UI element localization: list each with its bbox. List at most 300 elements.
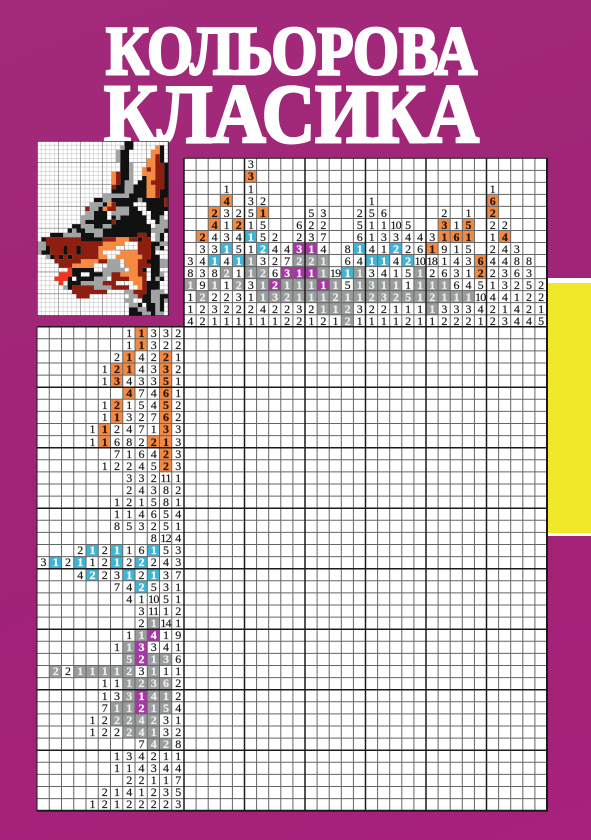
left row clues: 2 xyxy=(114,398,119,412)
top column clues: 3 xyxy=(466,302,471,316)
left row clues: 6 xyxy=(163,676,168,690)
top column clues: 1 xyxy=(296,290,302,304)
top column clues: 2 xyxy=(369,302,374,316)
left row clues: 2 xyxy=(126,483,132,497)
left row clues: 5 xyxy=(163,374,168,388)
top column clues: 2 xyxy=(538,290,543,304)
top column clues: 4 xyxy=(466,278,471,292)
left row clues: 2 xyxy=(102,543,107,557)
left row clues: 1 xyxy=(89,543,95,557)
top column clues: 4 xyxy=(187,314,193,328)
top column clues: 1 xyxy=(393,278,398,292)
top column clues: 2 xyxy=(357,206,362,220)
top column clues: 2 xyxy=(296,230,302,244)
left row clues: 1 xyxy=(163,604,168,618)
top column clues: 5 xyxy=(236,242,241,256)
top column clues: 4 xyxy=(502,254,507,268)
top column clues: 1 xyxy=(429,278,435,292)
top column clues: 1 xyxy=(381,218,386,232)
left row clues: 4 xyxy=(138,713,144,727)
left row clues: 1 xyxy=(175,580,181,594)
left row clues: 2 xyxy=(175,483,181,497)
top column clues: 3 xyxy=(248,278,253,292)
left row clues: 1 xyxy=(114,543,119,557)
top column clues: 1 xyxy=(453,218,459,232)
top column clues: 6 xyxy=(478,254,483,268)
left row clues: 2 xyxy=(102,568,107,582)
left row clues: 2 xyxy=(114,725,119,739)
top column clues: 1 xyxy=(320,290,326,304)
left row clues: 1 xyxy=(102,422,107,436)
top column clues: 1 xyxy=(212,254,217,268)
left row clues: 4 xyxy=(126,785,132,799)
top column clues: 6 xyxy=(417,242,422,256)
left row clues: 1 xyxy=(126,362,132,376)
top column clues: 1 xyxy=(417,302,422,316)
top column clues: 1 xyxy=(381,278,386,292)
top column clues: 4 xyxy=(502,230,507,244)
left row clues: 3 xyxy=(163,785,168,799)
left row clues: 7 xyxy=(114,447,119,461)
left row clues: 1 xyxy=(151,773,156,787)
left row clues: 2 xyxy=(89,568,95,582)
top column clues: 2 xyxy=(236,218,241,232)
left row clues: 1 xyxy=(175,592,181,606)
left row clues: 6 xyxy=(175,652,181,666)
top column clues: 7 xyxy=(320,230,326,244)
left row clues: 5 xyxy=(163,507,168,521)
top column clues: 1 xyxy=(357,314,362,328)
top column clues: 1 xyxy=(357,290,362,304)
top column clues: 4 xyxy=(224,254,229,268)
top column clues: 3 xyxy=(441,218,447,232)
top column clues: 2 xyxy=(236,302,241,316)
left row clues: 5 xyxy=(126,519,132,533)
left row clues: 1 xyxy=(114,664,119,678)
top column clues xyxy=(184,157,544,328)
top column clues: 1 xyxy=(224,278,229,292)
left row clues: 1 xyxy=(126,761,132,775)
top column clues: 1 xyxy=(248,254,253,268)
top column clues: 2 xyxy=(199,302,205,316)
left row clues: 1 xyxy=(89,435,95,449)
top column clues: 3 xyxy=(296,302,302,316)
top column clues: 7 xyxy=(284,254,289,268)
left row clues: 11 xyxy=(161,471,171,485)
top column clues: 2 xyxy=(296,254,302,268)
top column clues: 4 xyxy=(212,230,217,244)
left row clues: 1 xyxy=(89,555,95,569)
left row clues: 3 xyxy=(151,326,156,340)
top column clues: 2 xyxy=(381,302,386,316)
left row clues: 2 xyxy=(151,519,156,533)
left row clues: 2 xyxy=(151,555,156,569)
top column clues: 3 xyxy=(224,206,229,220)
left row clues: 4 xyxy=(175,761,181,775)
top column clues: 2 xyxy=(453,314,459,328)
left row clues: 2 xyxy=(175,604,181,618)
top column clues: 1 xyxy=(441,230,447,244)
left row clues: 5 xyxy=(163,701,168,715)
top column clues: 6 xyxy=(453,230,459,244)
left row clues: 3 xyxy=(114,568,119,582)
left row clues: 1 xyxy=(114,676,119,690)
top column clues: 4 xyxy=(453,254,459,268)
top column clues: 4 xyxy=(490,254,495,268)
top column clues: 5 xyxy=(538,314,543,328)
left row clues: 1 xyxy=(114,749,119,763)
left row clues: 6 xyxy=(114,435,119,449)
top column clues: 6 xyxy=(453,278,459,292)
left row clues: 5 xyxy=(126,652,132,666)
left row clues: 7 xyxy=(138,422,144,436)
left row clues: 4 xyxy=(126,580,132,594)
top column clues: 2 xyxy=(490,302,495,316)
top column clues: 4 xyxy=(369,242,374,256)
top column clues: 2 xyxy=(490,206,495,220)
left row clues: 1 xyxy=(175,616,181,630)
left row clues: 1 xyxy=(151,422,156,436)
left row clues: 3 xyxy=(40,555,46,569)
top column clues: 1 xyxy=(369,314,374,328)
title: КОЛЬОРОВА xyxy=(106,13,477,89)
left row clues: 3 xyxy=(151,362,156,376)
left row clues: 1 xyxy=(114,797,119,811)
top column clues: 1 xyxy=(381,242,386,256)
top column clues: 1 xyxy=(453,290,459,304)
left row clues: 1 xyxy=(102,459,107,473)
top column clues: 5 xyxy=(526,278,531,292)
left row clues: 1 xyxy=(89,725,95,739)
left row clues: 2 xyxy=(163,737,168,751)
top column clues: 2 xyxy=(369,290,374,304)
top column clues: 1 xyxy=(248,266,253,280)
left row clues: 3 xyxy=(163,652,168,666)
top column clues: 4 xyxy=(514,314,519,328)
top column clues: 2 xyxy=(466,314,471,328)
top column clues: 4 xyxy=(320,242,326,256)
top column clues: 1 xyxy=(466,206,471,220)
left row clues: 1 xyxy=(151,616,156,630)
top column clues: 1 xyxy=(248,314,253,328)
left row clues: 1 xyxy=(126,507,132,521)
left row clues: 1 xyxy=(138,688,144,702)
left row clues: 2 xyxy=(175,725,181,739)
top column clues: 3 xyxy=(393,230,398,244)
left row clues: 3 xyxy=(163,362,168,376)
left row clues: 3 xyxy=(114,688,119,702)
left row clues: 5 xyxy=(163,592,168,606)
top column clues: 1 xyxy=(224,242,229,256)
left row clues: 2 xyxy=(175,676,181,690)
left row clues: 1 xyxy=(102,676,107,690)
top column clues: 1 xyxy=(284,278,289,292)
top column clues: 1 xyxy=(320,278,326,292)
top column clues: 1 xyxy=(393,302,398,316)
top column clues: 1 xyxy=(236,266,241,280)
left row clues: 2 xyxy=(175,362,181,376)
top column clues: 6 xyxy=(490,194,495,208)
top column clues: 2 xyxy=(514,278,519,292)
left row clues: 2 xyxy=(102,785,107,799)
top column clues: 1 xyxy=(260,278,265,292)
top column clues: 2 xyxy=(199,290,205,304)
left row clues: 11 xyxy=(148,604,158,618)
left row clues: 1 xyxy=(175,374,181,388)
yellow side tab xyxy=(548,278,591,536)
top column clues: 1 xyxy=(405,278,410,292)
left row clues: 3 xyxy=(163,422,168,436)
top column clues: 4 xyxy=(199,254,205,268)
top column clues: 3 xyxy=(199,266,205,280)
left row clues: 3 xyxy=(151,676,156,690)
left row clues: 1 xyxy=(102,410,107,424)
left row clues: 2 xyxy=(163,350,168,364)
left row clues: 9 xyxy=(175,628,181,642)
left row clues: 2 xyxy=(163,447,168,461)
left row clues: 2 xyxy=(138,580,144,594)
left row clues: 1 xyxy=(126,568,132,582)
left row clues: 1 xyxy=(151,652,156,666)
top column clues: 1 xyxy=(248,230,253,244)
top column clues: 3 xyxy=(502,314,507,328)
top column clues: 2 xyxy=(393,242,398,256)
top column clues: 19 xyxy=(330,266,340,280)
left row clues: 1 xyxy=(175,713,181,727)
top column clues: 8 xyxy=(526,254,531,268)
left row clues: 2 xyxy=(151,797,156,811)
top column clues: 5 xyxy=(466,242,471,256)
top column clues: 1 xyxy=(224,182,229,196)
left row clues: 1 xyxy=(114,761,119,775)
top column clues: 1 xyxy=(236,314,241,328)
top column clues: 3 xyxy=(514,242,519,256)
left row clues: 4 xyxy=(175,701,181,715)
left row clues: 1 xyxy=(126,640,132,654)
top column clues: 1 xyxy=(308,314,314,328)
left row clues: 3 xyxy=(175,447,181,461)
top column clues: 1 xyxy=(320,254,326,268)
top column clues: 1 xyxy=(357,278,362,292)
left row clues: 1 xyxy=(89,713,95,727)
top column clues: 5 xyxy=(260,218,265,232)
top column clues: 3 xyxy=(212,242,217,256)
top column clues: 1 xyxy=(333,314,338,328)
left row clues: 2 xyxy=(102,797,107,811)
top column clues: 1 xyxy=(260,206,265,220)
left row clues: 1 xyxy=(53,555,58,569)
top column clues: 6 xyxy=(272,266,277,280)
left row clues: 1 xyxy=(102,362,107,376)
left row clues: 3 xyxy=(138,374,144,388)
top column clues: 1 xyxy=(417,278,422,292)
left row clues: 6 xyxy=(163,386,168,400)
left row clues: 3 xyxy=(126,410,132,424)
left row clues: 2 xyxy=(138,435,144,449)
top column clues: 2 xyxy=(405,242,410,256)
top column clues: 1 xyxy=(417,266,422,280)
top column clues: 2 xyxy=(308,218,314,232)
left row clues: 2 xyxy=(77,543,83,557)
left row clues: 2 xyxy=(163,338,168,352)
left row clues: 1 xyxy=(114,410,119,424)
left row clues: 1 xyxy=(138,628,144,642)
top column clues: 3 xyxy=(296,242,302,256)
top column clues: 1 xyxy=(441,278,447,292)
left row clues: 4 xyxy=(151,688,156,702)
top column clues: 1 xyxy=(393,314,398,328)
top column clues: 5 xyxy=(405,290,410,304)
left row clues: 1 xyxy=(175,640,181,654)
top column clues: 9 xyxy=(199,278,205,292)
left row clues: 4 xyxy=(163,640,168,654)
top column clues: 2 xyxy=(490,218,495,232)
left row clues: 6 xyxy=(138,447,144,461)
top column clues: 5 xyxy=(369,206,374,220)
top column clues: 3 xyxy=(453,302,459,316)
left row clues: 1 xyxy=(126,447,132,461)
left row clues: 1 xyxy=(102,398,107,412)
left row clues: 2 xyxy=(102,713,107,727)
left row clues: 2 xyxy=(138,773,144,787)
left row clues: 5 xyxy=(151,459,156,473)
left row clues: 4 xyxy=(138,459,144,473)
left row clues: 1 xyxy=(126,676,132,690)
left row clues: 14 xyxy=(160,616,171,630)
left row clues: 7 xyxy=(151,410,156,424)
left row clues: 2 xyxy=(126,773,132,787)
top column clues: 4 xyxy=(284,242,289,256)
top column clues: 1 xyxy=(538,302,543,316)
left row clues: 4 xyxy=(138,350,144,364)
left row clues: 8 xyxy=(126,435,132,449)
left row clues: 2 xyxy=(138,676,144,690)
left row clues: 2 xyxy=(126,555,132,569)
left row clues: 1 xyxy=(77,555,83,569)
left row clues: 1 xyxy=(114,640,119,654)
top column clues: 2 xyxy=(345,302,350,316)
left row clues: 4 xyxy=(138,725,144,739)
top column clues: 1 xyxy=(248,290,253,304)
left row clues: 2 xyxy=(175,410,181,424)
left row clues: 3 xyxy=(163,326,168,340)
top column clues: 2 xyxy=(212,206,217,220)
top column clues: 1 xyxy=(381,314,386,328)
top column clues: 8 xyxy=(514,254,519,268)
top column clues: 2 xyxy=(284,290,289,304)
top column clues: 5 xyxy=(345,278,350,292)
left row clues: 2 xyxy=(138,410,144,424)
left row clues: 4 xyxy=(163,761,168,775)
left row clues: 7 xyxy=(138,737,144,751)
top column clues: 2 xyxy=(320,218,326,232)
left row clues: 1 xyxy=(175,386,181,400)
left row clues: 2 xyxy=(138,701,144,715)
top column clues: 2 xyxy=(502,218,507,232)
left row clues: 3 xyxy=(163,580,168,594)
top column clues: 1 xyxy=(466,230,471,244)
left row clues: 8 xyxy=(175,737,181,751)
top column clues: 2 xyxy=(260,242,265,256)
left row clues: 4 xyxy=(175,507,181,521)
left row clues: 2 xyxy=(65,555,70,569)
left row clues: 7 xyxy=(138,386,144,400)
top column clues: 1 xyxy=(514,290,519,304)
left row clues: 5 xyxy=(163,519,168,533)
top column clues: 4 xyxy=(224,194,229,208)
top column clues: 1 xyxy=(466,290,471,304)
puzzle paper: clue columns and grid background xyxy=(184,158,547,811)
top column clues: 1 xyxy=(417,314,422,328)
top column clues: 1 xyxy=(212,278,217,292)
left row clues: 1 xyxy=(163,435,168,449)
top column clues: 1 xyxy=(490,278,495,292)
left row clues: 2 xyxy=(53,664,58,678)
left row clues: 1 xyxy=(138,326,144,340)
top column clues: 1 xyxy=(429,242,435,256)
top column clues: 3 xyxy=(224,230,229,244)
top column clues: 3 xyxy=(248,157,253,171)
left row clues: 1 xyxy=(151,664,156,678)
top column clues: 1 xyxy=(272,314,277,328)
left row clues: 3 xyxy=(151,761,156,775)
top column clues: 1 xyxy=(490,230,495,244)
left row clues: 1 xyxy=(114,785,119,799)
top column clues: 4 xyxy=(502,242,507,256)
left row clues xyxy=(40,326,182,811)
top column clues: 1 xyxy=(405,302,410,316)
left row clues: 3 xyxy=(138,519,144,533)
top column clues: 4 xyxy=(236,230,241,244)
left row clues: 3 xyxy=(114,374,119,388)
left row clues: 2 xyxy=(163,797,168,811)
top column clues: 6 xyxy=(441,266,447,280)
top column clues: 1 xyxy=(187,278,193,292)
top column clues: 2 xyxy=(199,314,205,328)
left row clues: 3 xyxy=(126,471,132,485)
left row clues: 1 xyxy=(138,338,144,352)
top column clues: 2 xyxy=(224,266,229,280)
left row clues: 4 xyxy=(126,592,132,606)
left row clues: 6 xyxy=(163,410,168,424)
left row clues: 3 xyxy=(138,664,144,678)
left row clues: 3 xyxy=(175,797,181,811)
left row clues: 2 xyxy=(126,725,132,739)
left row clues: 2 xyxy=(151,350,156,364)
top column clues: 2 xyxy=(284,302,289,316)
left row clues: 1 xyxy=(126,701,132,715)
left row clues: 4 xyxy=(126,386,132,400)
top column clues: 2 xyxy=(284,314,289,328)
left row clues: 1 xyxy=(175,350,181,364)
left row clues: 2 xyxy=(102,555,107,569)
top column clues: 3 xyxy=(236,290,241,304)
top column clues: 2 xyxy=(308,302,314,316)
top column clues: 6 xyxy=(296,218,302,232)
left row clues: 3 xyxy=(175,543,181,557)
left row clues: 3 xyxy=(175,555,181,569)
top column clues: 1 xyxy=(369,194,374,208)
left row clues: 1 xyxy=(114,555,119,569)
left row clues: 3 xyxy=(163,713,168,727)
left row clues: 2 xyxy=(175,338,181,352)
top column clues: 1 xyxy=(236,254,241,268)
top column clues: 10 xyxy=(415,254,425,268)
top column clues: 6 xyxy=(514,266,519,280)
top column clues: 1 xyxy=(308,290,314,304)
left row clues: 1 xyxy=(114,495,119,509)
top column clues: 2 xyxy=(538,278,543,292)
